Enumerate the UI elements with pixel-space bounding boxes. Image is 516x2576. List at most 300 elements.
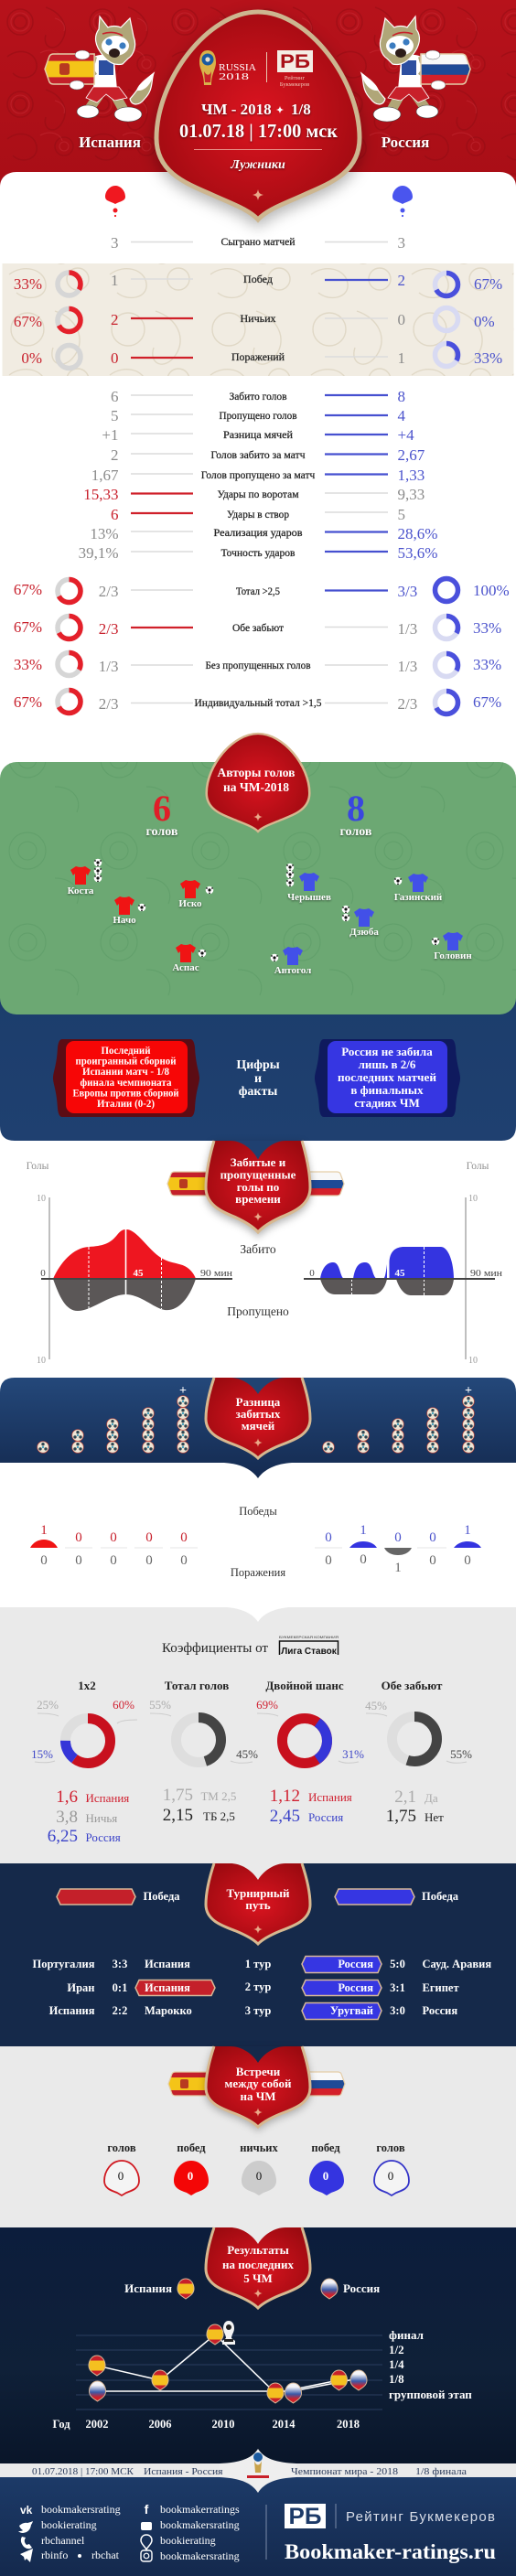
chart: Russia goals by time: 10 — [468, 1194, 478, 1204]
social links, column 1: rbinfo — [41, 2549, 68, 2561]
label: scored: Забито — [240, 1242, 276, 1256]
label: conceded: Пропущено — [227, 1304, 289, 1318]
legend: Spain win: Победа — [143, 1890, 180, 1903]
row: conceded per match — [91, 467, 425, 484]
odds list: Россия — [86, 1830, 121, 1844]
odds list: Ничья — [86, 1811, 117, 1825]
badge: tournament path — [206, 1863, 310, 1944]
player: own goal — [271, 947, 311, 976]
badge text: времени — [235, 1192, 281, 1206]
panel: footer — [0, 2449, 516, 2576]
match list: Russia: Сауд. Аравия — [423, 1958, 491, 1970]
points: Spain — [89, 2324, 348, 2403]
legend: Russia — [321, 2279, 380, 2299]
stat: draws: 0 — [256, 2169, 262, 2183]
legend: Spain — [124, 2279, 194, 2299]
stat: Russia wins: побед — [311, 2141, 340, 2154]
callout: Spain fact — [53, 1039, 199, 1117]
row: losses: 1 — [397, 349, 405, 367]
odds list: ТМ 2,5 — [201, 1789, 236, 1803]
line: Spain results — [97, 2334, 339, 2393]
row: conversion: Реализация ударов — [214, 526, 303, 539]
row: goals scored: Забито голов — [229, 390, 287, 402]
panel: goal difference — [0, 1378, 516, 1478]
odds list — [48, 1787, 129, 1846]
row: draws: 67% — [14, 313, 42, 330]
chart: Spain goals by time: 0 — [40, 1268, 46, 1279]
row: goal difference — [102, 426, 414, 444]
stadium: Лужники — [230, 158, 285, 172]
row: matches played: 3 — [111, 234, 119, 252]
row: draws: 2 — [111, 311, 119, 328]
match rounds: 2 тур — [245, 1980, 271, 1993]
row: losses: 0% — [21, 349, 42, 367]
match list: Spain: Испания — [145, 1981, 190, 1994]
odds list: 3,8 — [56, 1808, 78, 1827]
row: clean sheets: 33% — [473, 656, 501, 673]
chart: double chance: 31% — [342, 1747, 364, 1761]
chart: total goals: 55% — [149, 1698, 171, 1712]
stage labels — [389, 2328, 472, 2401]
table: match statistics — [79, 388, 437, 562]
stat: draws: ничьих — [240, 2141, 279, 2154]
odds list: 1,12 — [270, 1787, 300, 1806]
heading: odds from bookmaker: Коэффициенты от — [162, 1641, 268, 1656]
stat: draws — [240, 2141, 279, 2195]
player: own goal: Автогол — [274, 965, 311, 976]
legend: Spain win — [57, 1889, 180, 1905]
row: losses: 0 — [111, 349, 119, 367]
logo: rating bookmakers footer: РБ — [289, 2504, 322, 2529]
heading: figures and facts: факты — [239, 1085, 277, 1099]
chart: Spain goals by time: Голы — [27, 1161, 49, 1172]
stage labels: групповой этап — [389, 2388, 472, 2401]
chart: Russia goals by time: 0 — [309, 1268, 315, 1279]
row: individual total: Индивидуальный тотал >1,5 — [194, 696, 322, 709]
chart: wins and losses, Spain: 0 — [75, 1553, 82, 1568]
social links, column 1: bookmakersrating — [41, 2503, 121, 2516]
logo: rating bookmakers: Рейтинг — [285, 75, 306, 81]
chart: wins and losses, Russia: 0 — [325, 1553, 332, 1568]
row: shots on target — [111, 506, 405, 523]
Russia goals count — [340, 788, 372, 839]
match date and time: 01.07.18 | 17:00 мск — [179, 120, 339, 142]
panel: last 5 world cups — [0, 2227, 516, 2465]
callout: Spain fact: Испании матч - 1/8 — [82, 1067, 169, 1078]
logo: rating bookmakers: Букмекеров — [280, 81, 309, 88]
chart: wins and losses, Spain: 0 — [180, 1553, 188, 1568]
heading: figures and facts: и — [254, 1072, 262, 1086]
player: Isco: Иско — [178, 898, 202, 909]
odds list: Да — [425, 1791, 438, 1805]
stat: Spain wins: 0 — [188, 2169, 193, 2183]
badge text: пропущенные — [220, 1167, 296, 1182]
stat: Russia wins — [309, 2141, 344, 2195]
odds list — [163, 1786, 236, 1825]
player: Isco — [178, 880, 213, 909]
odds list: Испания — [86, 1791, 129, 1805]
icon: Russia ribbon — [304, 1172, 344, 1196]
year axis — [53, 2418, 360, 2431]
row: total over 2.5: 3/3 — [397, 583, 417, 600]
year axis: 2002 — [86, 2418, 108, 2431]
legend: Russia: Россия — [343, 2281, 380, 2295]
stat: Spain goals: голов — [107, 2141, 136, 2154]
row: losses — [21, 344, 502, 368]
match list: Spain: 0:1 — [113, 1981, 127, 1994]
badge: goal difference: Разница — [236, 1395, 281, 1409]
chart: wins and losses, Russia: 0 — [325, 1530, 332, 1545]
player: Costa — [68, 859, 102, 896]
row: both to score — [14, 617, 501, 639]
icon: Russia drop — [392, 186, 413, 217]
match list: Spain: Марокко — [145, 2004, 192, 2017]
chart: wins and losses, Spain: 0 — [75, 1530, 82, 1545]
callout: Russia fact: в финальных — [350, 1083, 424, 1097]
team name: Spain: Испания — [79, 134, 141, 151]
row: clean sheets: 1/3 — [99, 658, 119, 675]
match rounds: 3 тур — [245, 2004, 271, 2017]
chart: Spain goals by time: 45 — [134, 1268, 144, 1279]
logo: rating bookmakers footer: Рейтинг Букмекеров — [346, 2509, 495, 2525]
match list: Spain: 3:3 — [113, 1958, 127, 1970]
social links, column 2: bookierating — [160, 2534, 216, 2547]
row: clean sheets — [14, 653, 501, 677]
match list: Russia: 3:0 — [390, 2004, 405, 2017]
chart: double chance: Двойной шанс — [265, 1679, 344, 1692]
chart: wins and losses, Spain: 0 — [110, 1530, 117, 1545]
legend: Russia win: Победа — [422, 1890, 459, 1903]
stage labels: 1/8 — [389, 2372, 404, 2386]
row: goals scored: 6 — [111, 388, 119, 405]
chart: total goals: 45% — [236, 1747, 258, 1761]
chart: total goals: Тотал голов — [165, 1679, 229, 1692]
row: goals conceded — [111, 407, 406, 424]
year axis: 2018 — [337, 2418, 360, 2431]
badge: head to head: Встречи — [236, 2065, 281, 2078]
player: Gazinsky: Газинский — [394, 892, 443, 903]
chart: both to score — [365, 1679, 472, 1826]
badge: goal difference: мячей — [242, 1419, 275, 1433]
row: goals per match: 2 — [111, 446, 119, 464]
chart: wins and losses, Spain: 0 — [40, 1553, 48, 1568]
chart: Russia goals by time: 45 — [395, 1268, 405, 1279]
social links, column 2: bookmakersrating — [160, 2518, 240, 2531]
chart: wins and losses, Russia: 1 — [394, 1561, 402, 1575]
heading: figures and facts — [236, 1058, 280, 1099]
row: individual total: 67% — [14, 693, 42, 711]
match list: Russia: 3:1 — [390, 1981, 405, 1994]
badge: goal difference — [206, 1378, 310, 1458]
strip: match info: Испания - Россия — [144, 2466, 223, 2477]
row: wins: 1 — [111, 272, 119, 289]
odds list: Россия — [308, 1810, 343, 1824]
year axis: 2010 — [212, 2418, 234, 2431]
Spain goals count: 6 — [153, 788, 171, 829]
social links, column 2: bookmakerratings — [160, 2503, 240, 2516]
chart: wins and losses, Spain: 0 — [145, 1530, 153, 1545]
icon: world cup logo — [199, 50, 256, 85]
balls: Russia: + — [465, 1384, 472, 1398]
row: draws: 0 — [397, 311, 405, 328]
chart: 1x2: 60% — [113, 1698, 134, 1712]
odds list: 1,6 — [56, 1787, 78, 1807]
stage labels: 1/4 — [389, 2357, 404, 2371]
year axis: 2014 — [273, 2418, 296, 2431]
callout: Spain fact: проигранный сборной — [75, 1056, 177, 1067]
callout: Russia fact: стадиях ЧМ — [354, 1096, 420, 1110]
panel: odds — [0, 1606, 516, 1863]
chart: wins and losses, Russia: 1 — [464, 1523, 471, 1538]
stage labels: 1/2 — [389, 2343, 404, 2356]
row: goals scored — [111, 388, 405, 405]
row: draws: 0% — [474, 313, 495, 330]
badge text: Забитые и — [231, 1155, 286, 1169]
chart: wins and losses, Spain: 1 — [40, 1523, 48, 1538]
chart: Russia goals by time: 90 мин — [470, 1268, 502, 1279]
match list: Russia — [302, 1956, 491, 2020]
player: Nacho: Начо — [113, 915, 136, 926]
chart: wins and losses, Russia: 0 — [464, 1553, 471, 1568]
chart: 1x2 — [31, 1679, 137, 1846]
player: Dzyuba: Дзюба — [349, 927, 379, 938]
chart: wins and losses, Russia: 0 — [394, 1530, 402, 1545]
icon: trophy — [222, 2321, 235, 2345]
website: Bookmaker-ratings.ru — [285, 2540, 496, 2563]
match list: Russia: Россия — [338, 1958, 373, 1970]
chart: Russia goals by time — [304, 1161, 502, 1366]
chart: double chance: 69% — [256, 1698, 278, 1712]
legend: Russia win — [335, 1889, 459, 1905]
stat: Russia goals: голов — [376, 2141, 405, 2154]
icon: Spain ribbon — [167, 1172, 208, 1196]
match list: Spain: Испания — [49, 2004, 95, 2017]
panel: facts — [0, 993, 516, 1141]
balls: Spain: + — [179, 1384, 187, 1398]
badge: head to head: на ЧМ — [240, 2089, 276, 2103]
row: wins: 2 — [397, 272, 405, 289]
heart shield — [206, 1141, 310, 1232]
row: accuracy: 53,6% — [397, 544, 437, 562]
row: wins: 33% — [14, 275, 42, 293]
odds list: Нет — [425, 1810, 444, 1824]
row: goals per match: 2,67 — [397, 446, 425, 464]
row: accuracy: 39,1% — [79, 544, 119, 562]
chart: wins and losses, Russia: 0 — [429, 1553, 436, 1568]
match list: Spain: Португалия — [33, 1958, 95, 1970]
icon: Spain ribbon — [168, 2072, 209, 2096]
badge: goals by time — [167, 1141, 344, 1232]
year axis: Год — [53, 2418, 70, 2431]
chart: both to score: 45% — [365, 1699, 387, 1712]
badge: tournament path: Турнирный — [226, 1886, 290, 1900]
icon: Spain drop — [105, 186, 125, 217]
row: shots: Удары по воротам — [218, 488, 299, 500]
heading: figures and facts: Цифры — [236, 1058, 280, 1072]
stat: Spain goals — [104, 2141, 139, 2195]
stat: Spain wins: побед — [177, 2141, 206, 2154]
row: goal difference: +4 — [397, 426, 414, 444]
player: Gazinsky — [394, 874, 443, 903]
row: shots on target: 5 — [397, 506, 405, 523]
icon: world cup emblem — [247, 2453, 269, 2478]
chart: wins and losses, Russia — [315, 1523, 481, 1575]
chart: Russia goals by time: 10 — [468, 1356, 478, 1366]
logo: rating bookmakers — [277, 50, 313, 88]
row: losses: 33% — [474, 349, 502, 367]
match list: Russia: Россия — [423, 2004, 457, 2017]
chart: both to score: Обе забьют — [382, 1679, 443, 1692]
social links, column 2: bookmakersrating — [160, 2549, 240, 2562]
badge: last 5 world cups — [206, 2227, 310, 2308]
match stage: 1/8 — [291, 101, 311, 118]
row: shots: 9,33 — [397, 486, 425, 503]
Russia goals count: голов — [340, 825, 372, 839]
panel: header background — [0, 0, 516, 192]
stage labels: финал — [389, 2328, 424, 2342]
stat: Russia goals: 0 — [388, 2169, 393, 2183]
row: draws — [14, 307, 495, 331]
match list: Spain — [33, 1958, 215, 2017]
logo: rating bookmakers footer — [285, 2504, 495, 2529]
odds list: 6,25 — [48, 1827, 78, 1846]
player: Cheryshev — [286, 864, 331, 903]
strip: match info — [0, 2449, 516, 2493]
heading: odds from bookmaker: Лига Ставок — [281, 1647, 338, 1657]
balls: Russia — [323, 1384, 474, 1453]
row: both to score: Обе забьют — [232, 621, 285, 634]
row: total over 2.5 — [14, 578, 510, 602]
player: Costa: Коста — [68, 886, 94, 896]
stat: Russia wins: 0 — [323, 2169, 328, 2183]
badge: last 5 world cups: 5 ЧМ — [243, 2271, 273, 2285]
label: wins: Победы — [239, 1505, 277, 1518]
chart: both to score: 55% — [450, 1747, 472, 1761]
odds list — [386, 1787, 444, 1826]
heading: odds from bookmaker — [162, 1635, 339, 1657]
badge: head to head — [206, 2046, 310, 2127]
badge: head to head: между собой — [225, 2077, 292, 2090]
odds list: 2,15 — [163, 1806, 193, 1825]
odds list: 1,75 — [163, 1786, 193, 1805]
badge: scorers — [207, 734, 309, 832]
match list: Spain: 2:2 — [113, 2004, 127, 2017]
row: both to score: 33% — [473, 619, 501, 637]
social links, column 1: rbchannel — [41, 2534, 85, 2547]
chart: 1x2: 15% — [31, 1747, 53, 1761]
Spain goals count — [146, 788, 178, 839]
odds list: 2,45 — [270, 1807, 300, 1826]
row: shots on target: Удары в створ — [227, 508, 289, 521]
odds list: Испания — [308, 1790, 352, 1804]
match list: Spain: Иран — [67, 1981, 95, 1994]
social links, column 1: vk — [20, 2504, 33, 2517]
chart: wins and losses, Russia: 0 — [429, 1530, 436, 1545]
heading: odds from bookmaker: БУКМЕКЕРСКАЯ КОМПАНИЯ — [279, 1635, 339, 1639]
row: wins: 67% — [474, 275, 502, 293]
row: goals conceded: 5 — [111, 407, 119, 424]
icon: world cup logo: RUSSIA — [219, 62, 256, 73]
stat: Spain goals: 0 — [118, 2169, 124, 2183]
callout: Russia fact: последних матчей — [338, 1070, 437, 1084]
badge: last 5 world cups: на последних — [222, 2258, 294, 2271]
Russia goals count: 8 — [347, 788, 365, 829]
match list: Russia: 5:0 — [390, 1958, 405, 1970]
Spain goals count: голов — [146, 825, 178, 839]
row: individual total: 2/3 — [397, 695, 417, 713]
player: Golovin — [432, 932, 472, 961]
strip: match info: 01.07.2018 | 17:00 МСК — [32, 2466, 134, 2477]
badge: goal difference: забитых — [236, 1407, 281, 1421]
match rounds — [245, 1958, 271, 2017]
match rounds: 1 тур — [245, 1958, 271, 1970]
social links, column 2: f — [145, 2502, 149, 2517]
row: clean sheets: Без пропущенных голов — [205, 659, 311, 671]
row: goal difference: +1 — [102, 426, 119, 444]
label: losses: Поражения — [231, 1566, 285, 1579]
match list: Russia: Россия — [338, 1981, 373, 1994]
odds list: ТБ 2,5 — [203, 1809, 235, 1823]
row: clean sheets: 33% — [14, 656, 42, 673]
row: draws: Ничьих — [240, 312, 276, 325]
callout: Spain fact: финала чемпионата — [81, 1078, 172, 1089]
callout: Spain fact: Европы против сборной — [73, 1089, 179, 1100]
match list: Spain: Испания — [145, 1958, 190, 1970]
row: conceded per match: 1,33 — [397, 467, 425, 484]
row: shots — [83, 486, 425, 503]
row: conversion: 28,6% — [397, 525, 437, 542]
row: matches played: 3 — [397, 234, 405, 252]
icon: mascot with Spain flag — [45, 16, 154, 122]
row: conceded per match: Голов пропущено за матч — [201, 468, 315, 481]
social links, column 1: bookierating — [41, 2518, 97, 2531]
row: matches played: Сыграно матчей — [221, 235, 296, 248]
row: accuracy: Точность ударов — [221, 546, 296, 559]
balls: Spain — [38, 1384, 188, 1453]
row: shots on target: 6 — [111, 506, 119, 523]
chart: 1x2: 1x2 — [78, 1679, 96, 1692]
chart: Spain goals by time: 10 — [37, 1194, 46, 1204]
badge text — [220, 1155, 296, 1206]
panel: head to head — [0, 2046, 516, 2227]
row: clean sheets: 1/3 — [397, 658, 417, 675]
match list: Russia: Уругвай — [330, 2004, 373, 2017]
icon: Russia ribbon — [305, 2072, 345, 2096]
callout: Spain fact: Италии (0-2) — [97, 1099, 155, 1110]
table: totals — [14, 578, 510, 714]
chart: wins and losses, Spain: 0 — [145, 1553, 153, 1568]
callout: Spain fact: Последний — [101, 1046, 151, 1057]
badge: last 5 world cups: Результаты — [227, 2243, 289, 2257]
chart: Spain goals by time: 10 — [37, 1356, 46, 1366]
odds list: 2,1 — [394, 1787, 416, 1807]
row: goal difference: Разница мячей — [223, 428, 294, 441]
odds list: 1,75 — [386, 1807, 416, 1826]
stat: Russia goals — [374, 2141, 409, 2195]
row: total over 2.5: 67% — [14, 581, 42, 598]
row: individual total: 2/3 — [99, 695, 119, 713]
row: goals scored: 8 — [397, 388, 405, 405]
row: conversion — [90, 525, 437, 542]
row: conceded per match: 1,67 — [91, 467, 119, 484]
social links, column 2 — [141, 2502, 240, 2562]
badge: main match shield — [156, 12, 360, 220]
row: accuracy — [79, 544, 437, 562]
odds list — [270, 1787, 352, 1826]
strip: match info: 1/8 финала — [415, 2466, 467, 2477]
row: matches played — [111, 234, 405, 252]
chart: wins and losses, Spain: 0 — [180, 1530, 188, 1545]
